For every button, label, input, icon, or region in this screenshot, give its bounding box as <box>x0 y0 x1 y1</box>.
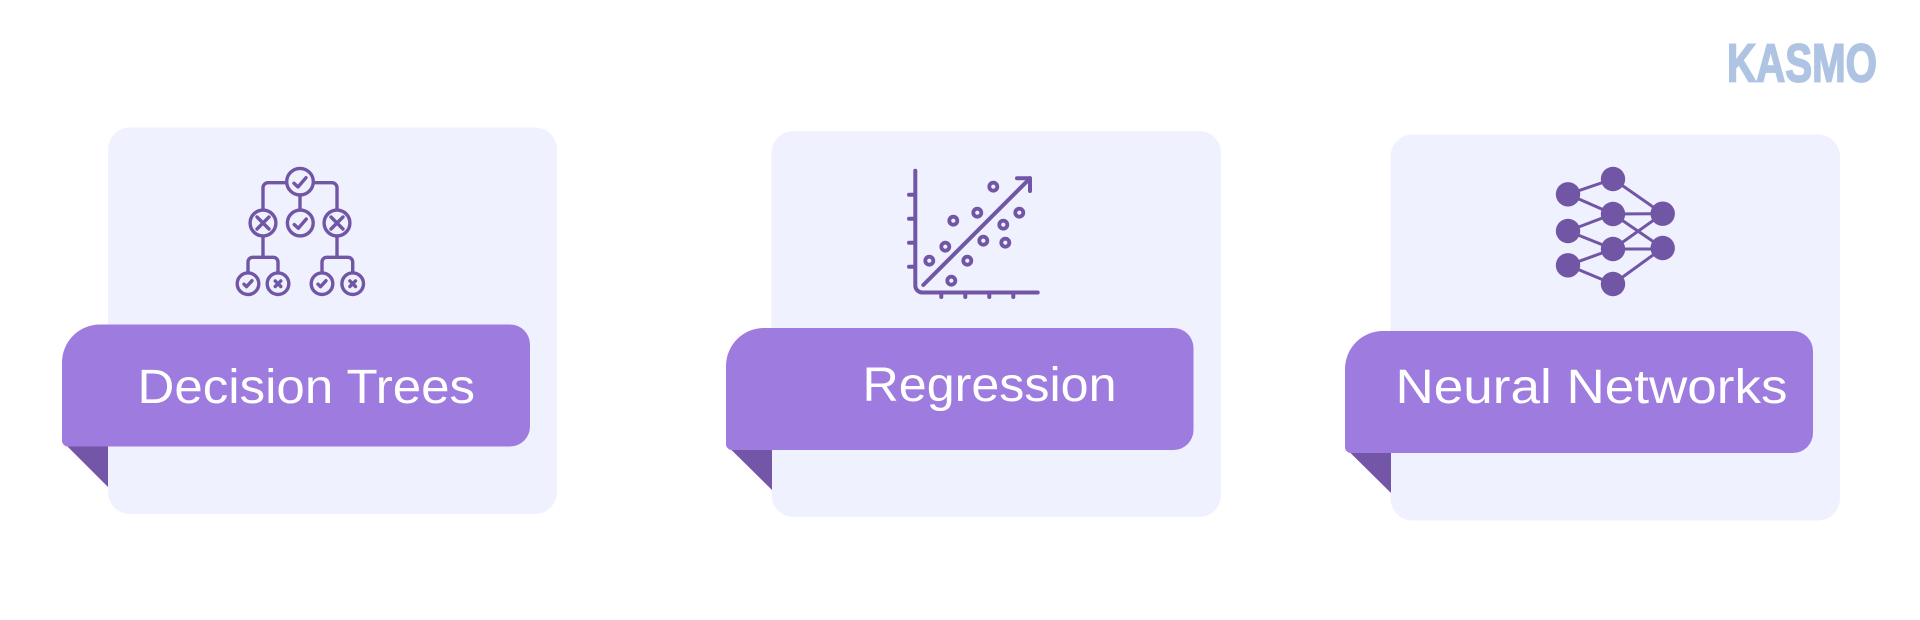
icon: neural network <box>1556 167 1675 296</box>
panel: Decision Trees <box>62 128 557 514</box>
panel: Regression <box>726 131 1221 517</box>
card background <box>108 128 557 514</box>
card background <box>772 131 1221 517</box>
heading: Decision Trees <box>138 361 475 414</box>
panel: Neural Networks <box>1345 134 1840 520</box>
ribbon fold <box>731 450 772 490</box>
icon: scatter plot with trend arrow <box>909 171 1038 297</box>
heading: Regression <box>862 359 1116 412</box>
ribbon fold <box>1350 452 1391 493</box>
ribbon fold <box>67 446 108 487</box>
ribbon banner <box>62 324 530 446</box>
ribbon banner <box>1345 331 1813 453</box>
ribbon banner <box>726 328 1194 450</box>
heading: Neural Networks <box>1396 361 1788 414</box>
icon: decision tree <box>237 168 364 295</box>
card background <box>1390 134 1840 520</box>
